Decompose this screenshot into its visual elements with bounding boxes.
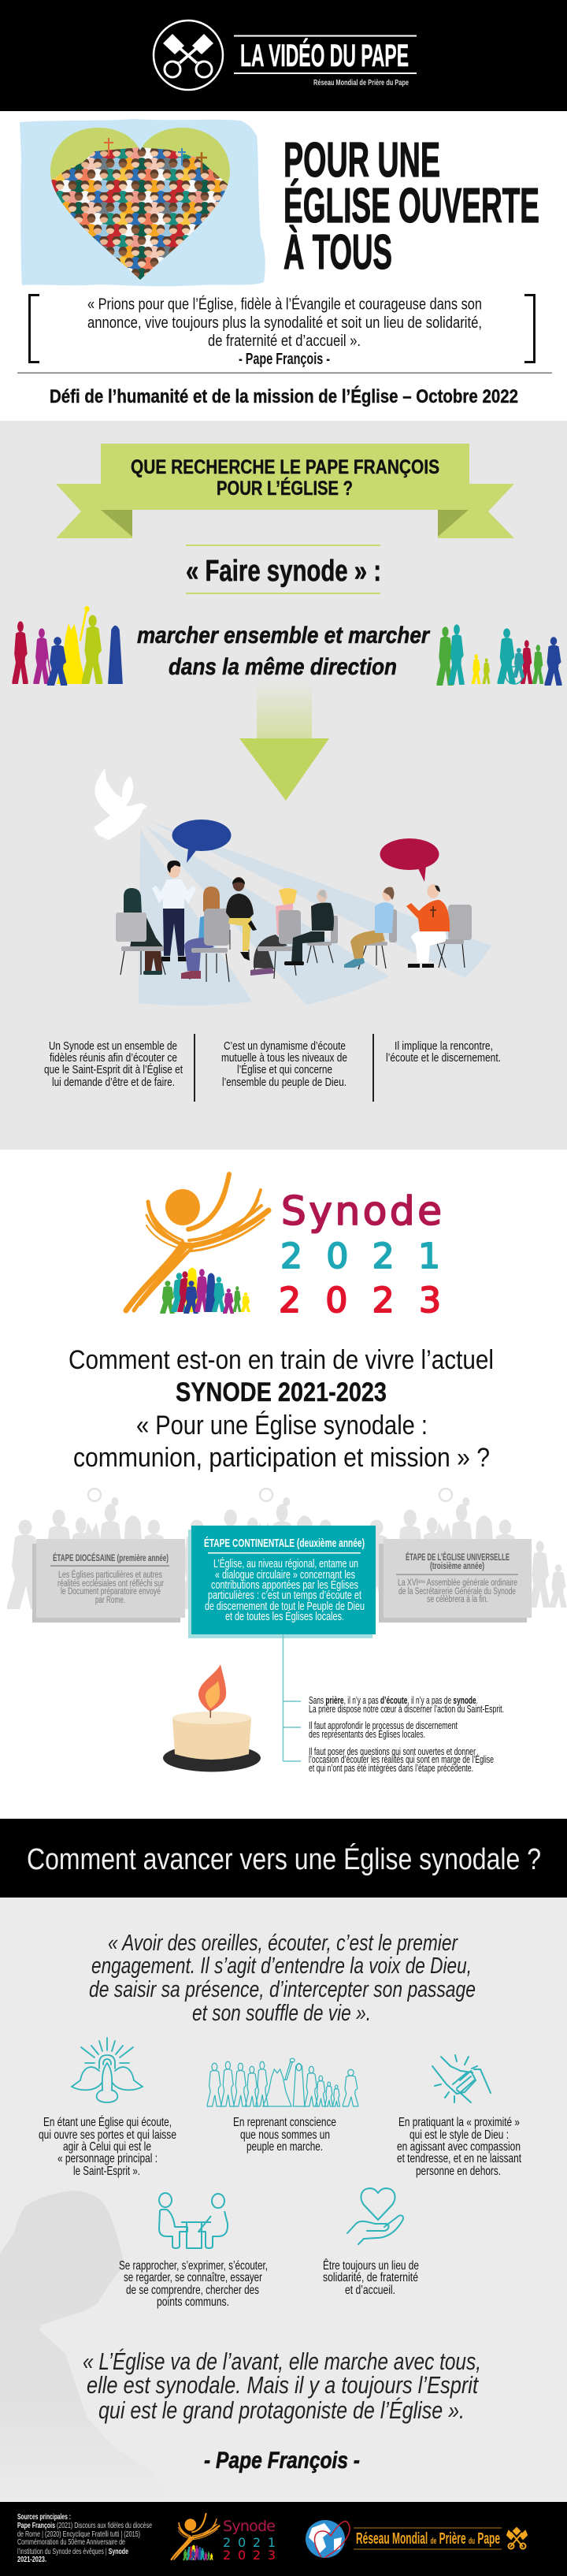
prayer quote with brackets bbox=[30, 295, 534, 368]
title bbox=[284, 133, 539, 280]
card: étape continentale: de discernement de tout le Peuple de Dieu bbox=[205, 1600, 365, 1613]
brand name: LA VIDÉO DU PAPE bbox=[240, 38, 409, 73]
text: être toujours bbox=[323, 2258, 419, 2297]
text column 3: Il implique la rencontre, bbox=[395, 1039, 493, 1053]
text column 2 bbox=[221, 1039, 347, 1089]
card: étape diocésaine: Les Églises particulières et autres bbox=[58, 1570, 162, 1580]
footer Synode logo: Synode bbox=[223, 2518, 276, 2535]
logo figure bbox=[126, 1174, 269, 1314]
card: étape continentale: et de toutes les Églises locales. bbox=[225, 1610, 344, 1623]
text: en reprenant conscience bbox=[233, 2116, 336, 2154]
text: être toujours: Être toujours un lieu de bbox=[323, 2258, 419, 2273]
text column 1: fidèles réunis afin d’écouter ce bbox=[50, 1051, 177, 1065]
priest bbox=[284, 889, 338, 965]
text: en reprenant conscience: En reprenant conscience bbox=[233, 2116, 336, 2129]
sources: l’institution du Synode des évêques | Synode bbox=[17, 2547, 128, 2556]
text: en reprenant conscience: que nous sommes un bbox=[240, 2128, 330, 2142]
person orange sweater bbox=[406, 884, 472, 968]
heading: Comment est-on bbox=[69, 1345, 494, 1473]
sources: de Rome | (2020) Encyclique Fratelli tutti | (2015) bbox=[17, 2530, 140, 2539]
banner: question: POUR L’ÉGLISE ? bbox=[217, 477, 353, 500]
text column 2: l’ensemble du peuple de Dieu. bbox=[222, 1076, 346, 1089]
footer Synode logo: 2023 bbox=[223, 2548, 276, 2563]
speech bubble red bbox=[380, 838, 439, 882]
card: étape continentale: « dialogue circulaire » concernant les bbox=[215, 1568, 355, 1582]
text: en pratiquant la proximité: en agissant avec compassion bbox=[397, 2140, 521, 2154]
sources: Commémoration du 50ème Anniversaire de bbox=[17, 2537, 125, 2547]
icon: two people at table bbox=[159, 2193, 228, 2248]
sources: 2021-2023. bbox=[17, 2555, 46, 2564]
illustration: heart crowd bbox=[20, 119, 265, 286]
card: étape Église universelle: ème bbox=[418, 1580, 425, 1585]
text: discernment points: Il faut poser des questions qui sont ouvertes et donner bbox=[309, 1746, 476, 1757]
logo wordmark bbox=[279, 1188, 442, 1321]
text column 1: que le Saint-Esprit dit à l’Église et bbox=[44, 1063, 183, 1076]
text column 2: l’Église et qui concerne bbox=[237, 1063, 332, 1076]
card: étape continentale: contributions apportées par les Églises bbox=[211, 1578, 358, 1592]
logo: Synode 2021-2023 bbox=[126, 1174, 442, 1321]
text: en pratiquant la proximité: personne en dehors. bbox=[416, 2165, 501, 2178]
text: en étant une Église: qui ouvre ses portes et qui laisse bbox=[39, 2128, 176, 2142]
prayer quote with brackets: de fraternité et d’accueil ». bbox=[208, 333, 361, 350]
text: être toujours: et d’accueil. bbox=[345, 2284, 395, 2297]
icon: clasped hands bbox=[432, 2055, 491, 2102]
card: étape Église universelle: de la Secrétairerie Générale du Synode bbox=[398, 1587, 516, 1597]
prayer quote with brackets: « Prions pour que l’Église, fidèle à l’Évangile et courageuse dans son bbox=[87, 295, 482, 314]
banner: question: QUE RECHERCHE LE PAPE FRANÇOIS bbox=[131, 456, 439, 478]
card: étape Église universelle: (troisième année) bbox=[430, 1560, 484, 1571]
light rays bbox=[139, 821, 491, 1005]
footer network name: Réseau Mondial de Prière du Pape bbox=[356, 2530, 500, 2548]
icon: people outline bbox=[207, 2058, 358, 2106]
heading: Comment est-on: « Pour une Église synodale : bbox=[136, 1411, 428, 1440]
text column 1: Un Synode est un ensemble de bbox=[49, 1039, 177, 1053]
quote: avoir des oreilles: et son souffle de vie ». bbox=[192, 2001, 371, 2026]
header: La Vidéo du Pape bbox=[0, 0, 567, 111]
illustration: people in circle bbox=[116, 861, 472, 982]
person black sweater bbox=[226, 877, 257, 961]
text: en étant une Église: « personnage principal : bbox=[57, 2152, 158, 2165]
text: en pratiquant la proximité bbox=[397, 2116, 521, 2178]
logo wordmark: 2021 bbox=[280, 1236, 440, 1277]
quote: l'Église va de l'avant: elle est synodale. Mais il y a toujours l’Esprit bbox=[87, 2371, 479, 2399]
sources: Sources principales : bbox=[17, 2512, 71, 2522]
card: étape diocésaine: ÉTAPE DIOCÉSAINE (première année) bbox=[53, 1552, 169, 1563]
text column 2: mutuelle à tous les niveaux de bbox=[221, 1051, 347, 1065]
footer Synode logo bbox=[172, 2514, 276, 2563]
text: en étant une Église: En étant une Église qui écoute, bbox=[43, 2114, 172, 2129]
card: étape diocésaine bbox=[32, 1539, 185, 1623]
text column 3 bbox=[386, 1039, 501, 1065]
text: discernment points: l’occasion d’écouter les réalités qui sont en marge de l’Église bbox=[309, 1753, 494, 1765]
text: se rapprocher: se regarder, se connaître, essayer bbox=[124, 2271, 262, 2284]
text column 2: C’est un dynamisme d’écoute bbox=[224, 1039, 346, 1053]
logo wordmark: 2023 bbox=[279, 1281, 441, 1321]
logo wordmark: Synode bbox=[281, 1188, 442, 1234]
quote: avoir des oreilles: « Avoir des oreilles, écouter, c’est le premier bbox=[108, 1931, 458, 1956]
brand tagline: Réseau Mondial de Prière du Pape bbox=[313, 79, 409, 87]
text: en pratiquant la proximité: qui est le style de Dieu : bbox=[410, 2128, 509, 2142]
card: étape Église universelle: se célèbrera à la fin. bbox=[427, 1595, 488, 1604]
quote: avoir des oreilles: engagement. Il s’agit d’entendre la voix de Dieu, bbox=[91, 1953, 472, 1979]
text column 3: l’écoute et le discernement. bbox=[386, 1051, 501, 1065]
text: se rapprocher bbox=[119, 2259, 268, 2309]
icon: globe and heart bbox=[306, 2520, 350, 2558]
heading: faire synode: « Faire synode » : bbox=[186, 555, 381, 588]
text: se rapprocher: points communs. bbox=[157, 2295, 229, 2309]
sources: Pape François (2021) Discours aux fidèles du diocèse bbox=[17, 2521, 152, 2530]
heading: Comment est-on: Comment est-on en train de vivre l’actuel bbox=[69, 1345, 494, 1375]
text: discernment points: Sans prière, il n’y a pas d’écoute, il n’y a pas de synode. bbox=[309, 1695, 478, 1706]
silhouette: Pope bbox=[0, 2191, 165, 2502]
text: en pratiquant la proximité: et tendresse, et en ne laissant bbox=[397, 2152, 521, 2165]
title: À TOUS bbox=[284, 225, 392, 280]
person seated left bbox=[116, 888, 165, 975]
text: être toujours: solidarité, de fraternité bbox=[323, 2271, 418, 2284]
quote: avoir des oreilles bbox=[89, 1931, 476, 2026]
text: se rapprocher: de se comprendre, chercher des bbox=[126, 2284, 259, 2297]
text: discernment points bbox=[309, 1695, 504, 1774]
text: marcher ensemble bbox=[137, 623, 431, 680]
text: en étant une Église: le Saint-Esprit ». bbox=[73, 2165, 140, 2178]
title: POUR UNE bbox=[284, 133, 440, 188]
person blonde bbox=[250, 888, 301, 979]
icon: orange keys bbox=[507, 2528, 527, 2548]
prayer quote with brackets: annonce, vive toujours plus la synodalité et soit un lieu de solidarité, bbox=[87, 314, 482, 332]
card: étape Église universelle: ÉTAPE DE L’ÉGLISE UNIVERSELLE bbox=[406, 1551, 510, 1563]
prayer quote with brackets: - Pape François - bbox=[239, 351, 330, 368]
connector lines bbox=[284, 1634, 301, 1761]
walking people right bbox=[436, 624, 562, 686]
heading: Comment est-on: SYNODE 2021-2023 bbox=[176, 1377, 387, 1407]
text: discernment points: des représentants des Églises locales. bbox=[309, 1728, 425, 1740]
card: étape diocésaine: réalités ecclésiales ont réfléchi sur bbox=[57, 1579, 164, 1589]
card: étape diocésaine: par Rome. bbox=[95, 1596, 125, 1605]
card: étape Église universelle: La XVI bbox=[398, 1578, 425, 1588]
text: discernment points: Il faut approfondir le processus de discernement bbox=[309, 1720, 458, 1731]
footer Synode logo: 2021 bbox=[223, 2535, 276, 2550]
card: étape Église universelle bbox=[379, 1539, 532, 1623]
text: marcher ensemble: marcher ensemble et marcher bbox=[137, 623, 431, 649]
card: étape diocésaine: le Document préparatoire envoyé bbox=[61, 1587, 161, 1597]
background silhouettes bbox=[7, 1489, 567, 1609]
card: étape continentale bbox=[188, 1526, 376, 1638]
quote: avoir des oreilles: de saisir sa présence, d’intercepter son passage bbox=[89, 1977, 476, 2002]
arrow down bbox=[239, 682, 329, 801]
person seated brown hair bbox=[181, 887, 230, 982]
text: discernment points: et qui n’ont pas été intégrées dans l’étape précédente. bbox=[309, 1763, 473, 1774]
text: en étant une Église: agir à Celui qui est le bbox=[63, 2140, 151, 2154]
icon: candle bbox=[163, 1664, 261, 1771]
icon: white dove bbox=[94, 768, 147, 840]
person tan trousers bbox=[344, 887, 397, 969]
card: étape continentale: L’Église, au niveau régional, entame un bbox=[213, 1557, 358, 1571]
card: étape Église universelle: Assemblée générale ordinaire bbox=[425, 1578, 517, 1588]
text: se rapprocher: Se rapprocher, s’exprimer, s’écouter, bbox=[119, 2259, 268, 2273]
header rules bbox=[234, 35, 417, 74]
quote: l'Église va de l'avant: qui est le grand protagoniste de l’Église ». bbox=[98, 2396, 465, 2424]
quote: l'Église va de l'avant bbox=[83, 2347, 481, 2424]
banner: question bbox=[56, 444, 514, 538]
standing man bbox=[152, 861, 196, 961]
text: en étant une Église bbox=[39, 2114, 176, 2178]
text: en pratiquant la proximité: En pratiquant la « proximité » bbox=[398, 2116, 520, 2129]
speech bubble blue bbox=[172, 820, 232, 863]
heading: Comment est-on: communion, participation et mission » ? bbox=[73, 1443, 490, 1473]
card: étape continentale: ÉTAPE CONTINENTALE (deuxième année) bbox=[204, 1537, 365, 1550]
icon: crossed keys logo bbox=[154, 20, 223, 90]
signature: - Pape François - bbox=[204, 2448, 360, 2474]
walking people left bbox=[12, 606, 123, 686]
icon: heart in hand bbox=[347, 2188, 403, 2244]
text: en reprenant conscience: peuple en marche. bbox=[246, 2140, 323, 2154]
text column 1: lui demande d’être et de faire. bbox=[52, 1076, 175, 1089]
footer bbox=[0, 2502, 567, 2576]
card: étape continentale: particulières : c’est un temps d’écoute et bbox=[208, 1589, 362, 1602]
icon: holy spirit dove bbox=[72, 2038, 143, 2102]
sources bbox=[17, 2512, 152, 2564]
banner: comment avancer bbox=[0, 1819, 567, 1898]
text column 1 bbox=[44, 1039, 183, 1089]
text: marcher ensemble: dans la même direction bbox=[169, 654, 397, 680]
